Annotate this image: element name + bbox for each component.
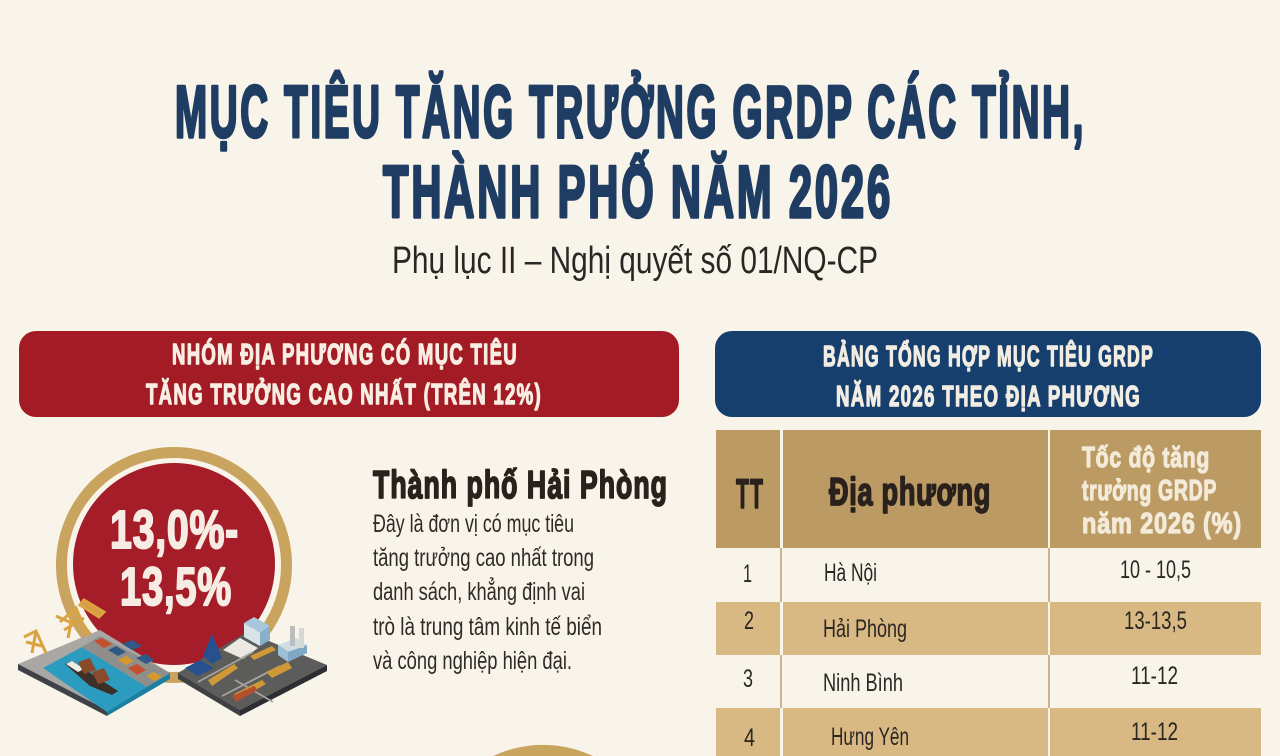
- table header: [716, 430, 1261, 548]
- row 3: Ninh Bình: [823, 669, 903, 697]
- gold ring: [62, 452, 286, 678]
- row 2: Hải Phòng: [823, 615, 907, 643]
- body text: [373, 510, 602, 675]
- panel: Hai Phong description: [373, 464, 668, 675]
- row 4: 4: [744, 724, 755, 752]
- row 4: Hưng Yên: [831, 723, 909, 751]
- table header: Địa phương: [829, 471, 991, 514]
- row 1: [743, 556, 1191, 588]
- row 2: [716, 602, 1261, 655]
- body text: tăng trưởng cao nhất trong: [373, 544, 594, 572]
- table: GRDP targets: [716, 430, 1261, 756]
- row 3: 11-12: [1131, 662, 1178, 690]
- panel: highest growth banner: NHÓM ĐỊA PHƯƠNG CÓ MỤC TIÊU: [172, 337, 518, 371]
- row 1: Hà Nội: [824, 559, 877, 587]
- panel: highest growth banner: [19, 331, 679, 417]
- next badge ring (cropped): [493, 745, 593, 756]
- row 2: 2: [744, 607, 754, 635]
- illustration: port: [18, 600, 170, 716]
- row 4: [716, 708, 1261, 756]
- red circle: [73, 463, 275, 665]
- badge value: 13,5%: [120, 557, 232, 617]
- row 1: 10 - 10,5: [1120, 556, 1191, 584]
- table header: năm 2026 (%): [1082, 508, 1242, 540]
- table header: trưởng GRDP: [1082, 475, 1217, 507]
- row 3: [743, 662, 1178, 697]
- badge value: 13,0%-: [110, 500, 239, 560]
- badge value: [110, 500, 239, 617]
- heading: Thành phố Hải Phòng: [373, 464, 668, 507]
- body text: Đây là đơn vị có mục tiêu: [373, 510, 574, 538]
- panel: Hai Phong badge: [18, 452, 327, 716]
- column rules: [780, 548, 1050, 708]
- illustration: industrial zone: [178, 617, 327, 716]
- body text: danh sách, khẳng định vai: [373, 576, 585, 606]
- row 4: 11-12: [1131, 718, 1178, 746]
- subtitle: Phụ lục II – Nghị quyết số 01/NQ-CP: [392, 240, 878, 282]
- row 1: 1: [743, 560, 752, 588]
- table header: Tốc độ tăng: [1082, 442, 1210, 474]
- title: THÀNH PHỐ NĂM 2026: [383, 151, 893, 233]
- panel: highest growth banner: TĂNG TRƯỞNG CAO NHẤT (TRÊN 12%): [146, 377, 542, 411]
- table header: TT: [736, 470, 764, 517]
- body text: và công nghiệp hiện đại.: [373, 647, 572, 675]
- panel: summary table banner: [715, 331, 1261, 417]
- row 3: 3: [743, 665, 753, 693]
- body text: trò là trung tâm kinh tế biển: [373, 613, 602, 641]
- title: [175, 72, 1086, 233]
- row 2: 13-13,5: [1124, 607, 1187, 635]
